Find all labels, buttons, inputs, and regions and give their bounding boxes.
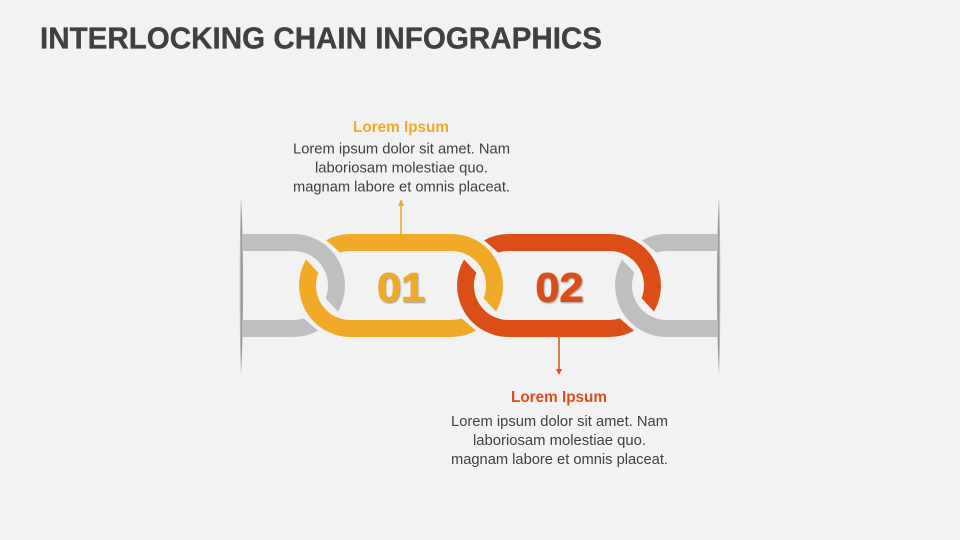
description: step 02: Lorem ipsum dolor sit amet. Nam [451,414,668,430]
chain [240,197,720,375]
arrow: step 02 down [556,337,562,375]
heading: step 02: Lorem Ipsum [511,389,607,406]
number 02: 02 [536,264,584,310]
description: step 02 [451,414,668,468]
description: step 01: laboriosam molestiae quo. [315,160,488,176]
link: orange 01 [299,234,503,337]
right edge cut [717,197,720,375]
description: step 02: magnam labore et omnis placeat. [451,452,668,468]
arrow: step 01 up [398,199,404,234]
description: step 01: Lorem ipsum dolor sit amet. Nam [293,142,510,158]
description: step 01 [293,142,510,196]
number 01: 01 [377,264,425,310]
link: red 02 [457,234,661,337]
description: step 01: magnam labore et omnis placeat. [293,180,510,196]
left edge cut [240,197,243,375]
text block: step 02 [451,389,668,468]
title: INTERLOCKING CHAIN INFOGRAPHICS [40,22,602,56]
link: left gray [242,234,345,337]
link: right gray [615,234,718,337]
text block: step 01 [293,119,510,196]
description: step 02: laboriosam molestiae quo. [473,433,646,449]
heading: step 01: Lorem Ipsum [353,119,449,136]
